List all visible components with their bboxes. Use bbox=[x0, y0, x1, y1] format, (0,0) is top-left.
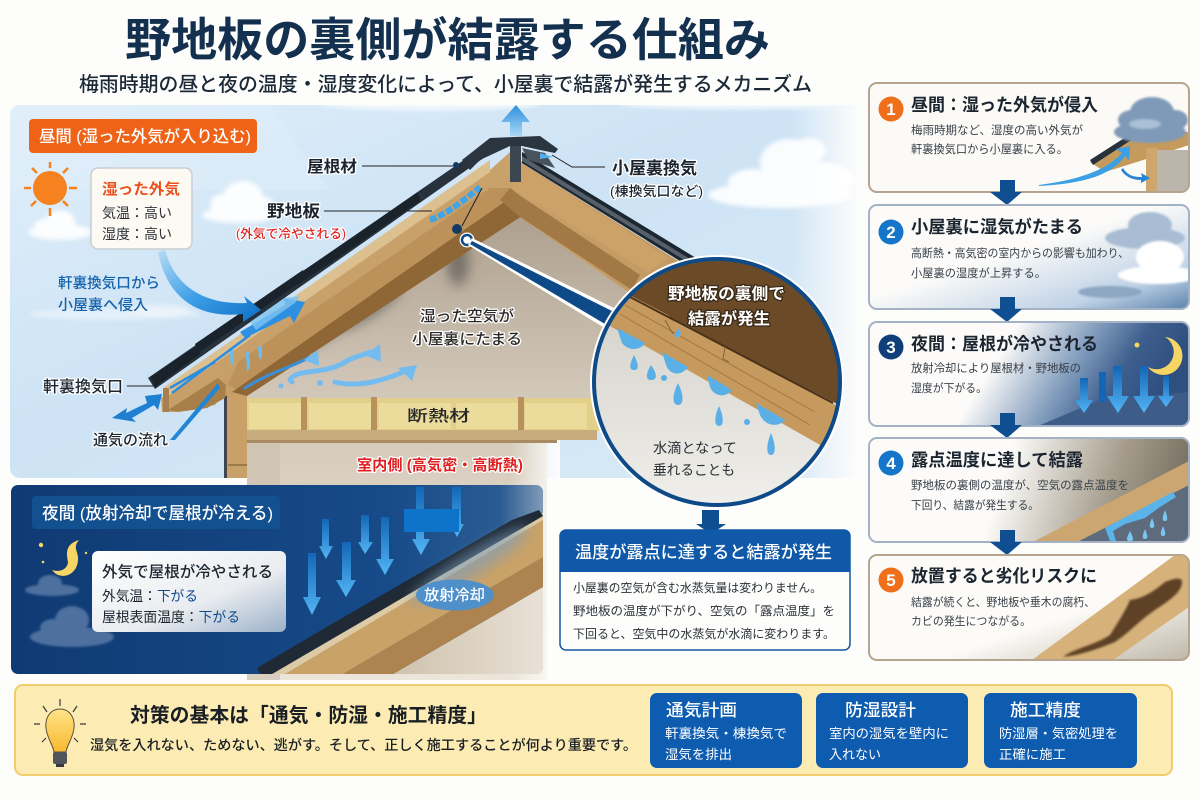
night roof detail bbox=[257, 510, 543, 674]
badge: daytime bbox=[29, 119, 257, 153]
card: vapor barrier design bbox=[816, 693, 968, 768]
arrow: step 1 to 2 bbox=[990, 180, 1022, 205]
card: step 2: 高断熱・高気密の室内からの影響も加わり、 bbox=[911, 246, 1129, 260]
card: step 3: 夜間：屋根が冷やされる bbox=[911, 334, 1098, 354]
card: step 5: カビの発生につながる。 bbox=[911, 614, 1031, 628]
card: step 2: 小屋裏に湿気がたまる bbox=[911, 217, 1083, 237]
card: step 1: 昼間：湿った外気が侵入 bbox=[911, 95, 1098, 115]
card: vapor barrier design: 室内の湿気を壁内に bbox=[829, 726, 949, 741]
arrow heads and air droplets bbox=[278, 344, 417, 388]
label: moist air collects: 小屋裏にたまる bbox=[412, 330, 522, 348]
art: dripping sheathing bbox=[1033, 461, 1189, 542]
card: ventilation plan: 湿気を排出 bbox=[665, 747, 732, 762]
callout: roof chilled bbox=[92, 551, 286, 632]
wall post bbox=[224, 385, 247, 478]
card: step 3 bbox=[869, 322, 1189, 426]
panel: dew point explanation: 下回ると、空気中の水蒸気が水滴に変わります。 bbox=[573, 626, 835, 641]
card: step 2: 小屋裏の湿度が上昇する。 bbox=[911, 266, 1046, 280]
art: rotting timber bbox=[1032, 555, 1189, 660]
insulation bbox=[247, 397, 607, 443]
interior room wall bbox=[247, 440, 547, 680]
arrow: step 3 to 4 bbox=[990, 413, 1022, 438]
callout: moist outside air: 湿度：高い bbox=[102, 226, 172, 242]
panel: dew point explanation: 温度が露点に達すると結露が発生 bbox=[575, 542, 832, 562]
card: workmanship: 防湿層・気密処理を bbox=[999, 726, 1118, 741]
card: step 1: 梅雨時期など、湿度の高い外気が bbox=[911, 123, 1083, 137]
arrow: moist air from outside bbox=[158, 250, 261, 322]
ridge vent cap bbox=[462, 136, 558, 182]
callout: moist outside air: 湿った外気 bbox=[102, 180, 180, 198]
icon: moon and stars bbox=[39, 540, 87, 576]
icon: light bulb bbox=[34, 699, 86, 767]
icon: sun bbox=[24, 162, 77, 216]
lens text: condensation occurs: 野地板の裏側で bbox=[668, 284, 785, 303]
summary text: 湿気を入れない、ためない、逃がす。そして、正しく施工することが何より重要です。 bbox=[90, 737, 637, 753]
card: workmanship: 施工精度 bbox=[1010, 701, 1081, 720]
card: vapor barrier design: 入れない bbox=[829, 747, 881, 762]
condensation beads under sheathing bbox=[430, 187, 480, 220]
leader from detail to lens bbox=[452, 188, 618, 330]
card: vapor barrier design: 防湿設計 bbox=[845, 701, 916, 720]
label: soffit entry bbox=[58, 274, 160, 314]
card: step 1: 1 bbox=[886, 100, 896, 119]
callout: moist outside air: 気温：高い bbox=[102, 205, 172, 221]
card: step 1: 軒裏換気口から小屋裏に入る。 bbox=[911, 142, 1068, 156]
card: step 3: 3 bbox=[886, 338, 896, 357]
panel: dew point explanation: 野地板の温度が下がり、空気の「露点温度」を bbox=[573, 603, 835, 618]
card: step 5: 結露が続くと、野地板や垂木の腐朽、 bbox=[911, 595, 1095, 609]
arrow: lens to dew point panel bbox=[696, 510, 726, 534]
card: workmanship bbox=[984, 693, 1137, 768]
label: roof material: 屋根材 bbox=[307, 157, 357, 176]
card: step 3: 湿度が下がる。 bbox=[911, 381, 987, 395]
arrow: eave vent airflow bbox=[112, 394, 162, 422]
card: step 2 bbox=[869, 205, 1198, 309]
callout: roof chilled: 外気で屋根が冷やされる bbox=[102, 562, 273, 581]
label: indoor side: 室内側 (高気密・高断熱) bbox=[357, 456, 523, 474]
arrow: step 4 to 5 bbox=[990, 530, 1022, 555]
badge: daytime: 昼間 (湿った外気が入り込む) bbox=[39, 126, 251, 146]
title: 野地板の裏側が結露する仕組み bbox=[125, 14, 770, 66]
card: step 4 bbox=[869, 438, 1189, 542]
panel: countermeasures banner bbox=[15, 685, 1172, 775]
attic space bbox=[247, 212, 640, 400]
card: step 3: 放射冷却により屋根材・野地板の bbox=[911, 361, 1081, 375]
card: step 2: 2 bbox=[886, 223, 896, 242]
label: soffit vent bbox=[43, 377, 158, 396]
callout: roof chilled: 外気温：下がる bbox=[102, 588, 198, 604]
card: step 5: 放置すると劣化リスクに bbox=[911, 566, 1097, 586]
art: moist air entering eave bbox=[1039, 97, 1189, 192]
lens text: droplets fall: 垂れることも bbox=[653, 462, 735, 478]
label: sheathing: (外気で冷やされる) bbox=[236, 226, 346, 241]
label: sheathing bbox=[236, 202, 432, 241]
card: step 1 bbox=[869, 83, 1189, 192]
heading: 対策の基本は「通気・防湿・施工精度」 bbox=[130, 704, 487, 727]
block arrow band bbox=[404, 509, 459, 532]
badge: nighttime: 夜間 (放射冷却で屋根が冷える) bbox=[42, 503, 273, 523]
art: clouds bbox=[1078, 212, 1198, 298]
card: step 4: 4 bbox=[886, 454, 896, 473]
card: step 4: 下回り、結露が発生する。 bbox=[911, 498, 1039, 512]
lens text: droplets fall bbox=[653, 440, 737, 478]
label: sheathing: 野地板 bbox=[267, 202, 320, 221]
card: ventilation plan bbox=[650, 693, 802, 768]
card: step 4: 野地板の裏側の温度が、空気の露点温度を bbox=[911, 478, 1129, 492]
label: attic ventilation: 小屋裏換気 bbox=[612, 158, 697, 178]
arrows: rising moist air in attic bbox=[245, 352, 408, 388]
sky background bbox=[10, 98, 860, 478]
lens: condensation detail bbox=[590, 255, 845, 510]
rafters and wood framing bbox=[161, 152, 680, 412]
card: step 5 bbox=[869, 555, 1189, 660]
card: ventilation plan: 軒裏換気・棟換気で bbox=[665, 726, 787, 741]
lens text: condensation occurs bbox=[668, 284, 785, 328]
badge: nighttime bbox=[32, 496, 280, 529]
label: radiative cooling bbox=[416, 580, 494, 610]
label: radiative cooling: 放射冷却 bbox=[424, 587, 485, 604]
card: step 4: 露点温度に達して結露 bbox=[911, 450, 1083, 470]
label: insulation: 断熱材 bbox=[407, 407, 470, 425]
card: step 5: 5 bbox=[886, 571, 896, 590]
humidity haze bbox=[292, 238, 469, 355]
arrows: heat radiating downward bbox=[303, 487, 464, 615]
label: soffit entry: 小屋裏へ侵入 bbox=[58, 296, 149, 314]
clouds: night bbox=[25, 575, 114, 647]
label: soffit vent: 軒裏換気口 bbox=[43, 377, 123, 396]
label: attic ventilation: (棟換気口など) bbox=[610, 183, 703, 199]
label: attic ventilation bbox=[552, 155, 703, 199]
lens text: droplets fall: 水滴となって bbox=[653, 440, 737, 456]
panel: daytime sky and house cross-section bbox=[10, 98, 860, 680]
roofing shingles bbox=[148, 142, 696, 389]
art: moon, cold arrows, roof bbox=[1038, 337, 1189, 426]
callout: roof chilled: 屋根表面温度：下がる bbox=[102, 609, 240, 625]
arrows: airflow under sheathing bbox=[170, 296, 305, 440]
subtitle: 梅雨時期の昼と夜の温度・湿度変化によって、小屋裏で結露が発生するメカニズム bbox=[79, 73, 812, 96]
callout: moist outside air bbox=[91, 168, 192, 249]
arrow: step 2 to 3 bbox=[990, 297, 1022, 322]
panel: nighttime radiative cooling bbox=[11, 485, 543, 674]
lens text: condensation occurs: 結露が発生 bbox=[688, 309, 770, 328]
clouds bbox=[28, 138, 854, 320]
label: moist air collects: 湿った空気が bbox=[420, 307, 514, 325]
label: roof material bbox=[307, 157, 459, 176]
label: airflow: 通気の流れ bbox=[93, 432, 168, 449]
panel: dew point explanation: 小屋裏の空気が含む水蒸気量は変わりません。 bbox=[573, 580, 822, 595]
frost haze over ridge end bbox=[406, 520, 532, 608]
label: moist air collects bbox=[412, 307, 522, 348]
card: ventilation plan: 通気計画 bbox=[666, 701, 737, 720]
label: soffit entry: 軒裏換気口から bbox=[58, 274, 160, 292]
arrow: air exits at ridge bbox=[501, 105, 530, 136]
card: workmanship: 正確に施工 bbox=[999, 747, 1066, 762]
panel: dew point explanation bbox=[560, 530, 850, 650]
